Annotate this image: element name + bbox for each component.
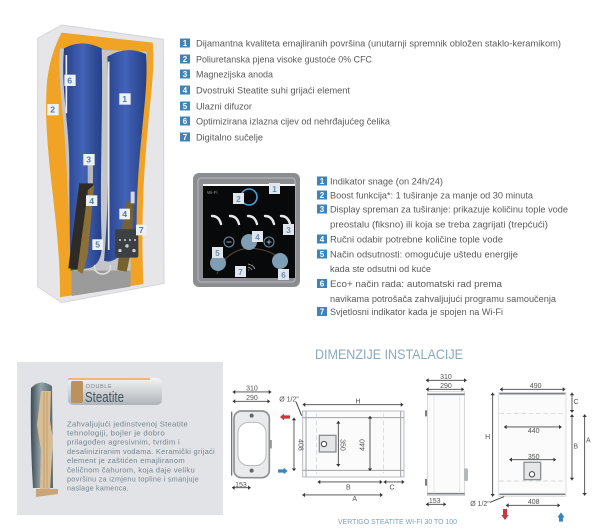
illustration: water heater cutaway (38, 25, 164, 303)
item 5: 5 (183, 102, 188, 111)
diagram: horizontal installation: Ø 1/2" (279, 397, 299, 404)
function 2: Boost funkcija*: 1 tuširanje za manje od 30 minuta (330, 190, 533, 200)
item 1: Dijamantna kvaliteta emajliranih površina (unutarnji spremnik obložen staklo-keramikom) (196, 38, 561, 48)
caption: model range: VERTIGO STEATITE WI-FI 30 TO 100 (338, 517, 457, 526)
function 6: Eco+ način rada: automatski rad prema (330, 279, 502, 289)
diagram: vertical installation: 350 (528, 454, 540, 461)
function 5: kada ste odsutni od kuće (330, 264, 431, 274)
steatite description (67, 420, 215, 492)
dimensions (303, 403, 403, 406)
diagram: vertical installation: C (573, 399, 579, 406)
function 1: Indikator snage (on 24h/24) (330, 176, 443, 186)
diagram: vertical installation: B (573, 443, 578, 450)
diagram: side view (426, 374, 468, 505)
heating element right (117, 202, 134, 272)
number labels (47, 75, 147, 250)
function 3: 3 (320, 205, 325, 214)
steatite description: površinu za izmjenu topline i smanjuje (67, 474, 199, 484)
polyurethane foam (46, 33, 153, 297)
function 5 (317, 250, 518, 274)
steatite description: čeličnom čahurom, koja daje veliku (67, 466, 195, 474)
panel number labels: 5 (215, 249, 220, 258)
bottom cavity (72, 271, 131, 296)
diagram: top view: 290 (246, 395, 258, 402)
control panel illustration: Wi-Fi (207, 190, 218, 195)
panel number labels: 7 (238, 268, 243, 277)
diagram: horizontal installation: 350 (339, 439, 346, 451)
right tank (104, 50, 147, 262)
steatite description: desaliniziranim vodama. Keramički grijaći (67, 447, 215, 456)
boost ring (241, 189, 257, 205)
function 6: 6 (320, 280, 325, 288)
function 5: Način odsutnosti: omogućuje uštedu energije (330, 250, 518, 260)
steatite description: Zahvaljujući jedinstvenoj Steatite (67, 420, 188, 428)
number labels: 1 (122, 94, 127, 104)
panel number labels: 3 (286, 226, 291, 235)
red outlet arrow (280, 414, 290, 420)
diagram: vertical installation: 440 (528, 428, 540, 435)
steatite badge: Steatite (85, 390, 124, 406)
dimensions (500, 388, 565, 391)
item 4: Dvostruki Steatite suhi grijaći element (196, 86, 350, 96)
steatite description: naslage kamenca. (67, 484, 129, 492)
display box (524, 462, 541, 480)
diagram: side view: 153 (429, 498, 441, 505)
diagram: top view: 310 (246, 386, 258, 393)
panel number labels: 2 (236, 195, 241, 204)
number labels: 3 (86, 155, 91, 165)
panel frame (193, 173, 300, 287)
number labels: 4 (122, 209, 127, 219)
heater casing (38, 25, 164, 303)
steatite badge (68, 378, 162, 406)
diagram: top view (232, 386, 271, 489)
function 7: Svjetlosni indikator kada je spojen na Wi-Fi (330, 307, 503, 317)
function 6: navikama potrošača zahvaljujući programu samoučenja (330, 294, 556, 304)
item 2: Poliuretanska pjena visoke gustoće 0% CFC (196, 54, 372, 64)
diagram: top view: 153 (235, 482, 247, 489)
outlet tubes (66, 55, 109, 250)
number labels: 2 (50, 105, 55, 115)
feature list: control panel functions (317, 176, 568, 317)
number labels: 7 (139, 225, 144, 235)
black screen (203, 184, 295, 278)
panel background (17, 362, 223, 515)
red outlet arrow (501, 509, 509, 520)
number labels: 4 (89, 196, 94, 206)
heading: installation dimensions: DIMENZIJE INSTALACIJE (315, 346, 463, 362)
item 3: 3 (183, 70, 188, 79)
function 1: 1 (320, 177, 325, 186)
blue inlet arrow (557, 512, 565, 522)
function 4: 4 (320, 235, 325, 244)
mini display (115, 229, 138, 258)
steatite description: tehnologiji, bojler je dobro (67, 428, 165, 438)
diagram: vertical installation: H (485, 434, 490, 441)
function 2: 2 (320, 191, 325, 200)
diagram: side view: 310 (440, 374, 452, 381)
panel number labels: 4 (255, 233, 260, 242)
panel number labels (212, 183, 294, 280)
diagram: horizontal installation (278, 397, 404, 503)
diagram: vertical installation: A (586, 438, 591, 445)
blue inlet arrow (278, 468, 288, 474)
diagram: vertical installation: Ø 1/2" (470, 501, 490, 508)
function 5: 5 (320, 250, 325, 259)
panel: double steatite (17, 362, 223, 515)
arc (217, 248, 282, 274)
diagram: horizontal installation: H (355, 398, 361, 405)
item 7: Digitalno sučelje (196, 132, 263, 142)
steatite description: prilagođen agresivnim, tvrdim i (67, 438, 180, 446)
panel number labels: 6 (281, 271, 286, 280)
diagram: vertical installation: 490 (530, 383, 542, 390)
shower icons (212, 216, 290, 224)
diagram: horizontal installation: B (346, 484, 351, 491)
item 6: Optimizirana izlazna cijev od nehrđajućeg čelika (196, 116, 390, 126)
diagram: horizontal installation: A (352, 496, 357, 503)
function 7: 7 (320, 308, 325, 316)
function 3: preostalu (fiksno) ili koja se treba zagrijati (trepćući) (330, 220, 548, 230)
panel number labels: 1 (272, 185, 277, 194)
function 4: Ručni odabir potrebne količine tople vode (330, 234, 503, 244)
item 3: Magnezijska anoda (196, 70, 273, 80)
item 4: 4 (183, 86, 188, 95)
left tank (63, 43, 102, 271)
anode (88, 163, 93, 183)
diagram: horizontal installation: 440 (360, 439, 367, 451)
control buttons (210, 234, 288, 271)
diagram: horizontal installation: 408 (297, 439, 304, 451)
diffuser (94, 265, 110, 274)
item 5: Ulazni difuzor (196, 102, 252, 112)
steatite badge: DOUBLE (86, 384, 112, 390)
display box (319, 435, 336, 452)
control panel illustration (193, 173, 300, 287)
item 1: 1 (183, 39, 188, 48)
feature list: heater components (180, 38, 561, 142)
steatite description: element je zaštićen emajliranom (67, 456, 185, 465)
item 2: 2 (183, 55, 188, 64)
icon: steatite heating element (31, 382, 58, 497)
wifi symbol (248, 264, 255, 270)
number labels: 6 (67, 75, 72, 85)
item 6: 6 (183, 117, 188, 126)
item 7: 7 (183, 133, 188, 142)
diagram: vertical installation: 408 (528, 499, 540, 506)
function 3 (317, 204, 568, 230)
inner shell shadow (59, 48, 147, 271)
diagram: side view: 290 (440, 383, 452, 390)
diagram: vertical installation (470, 383, 591, 522)
function 3: Display spreman za tuširanje: prikazuje količinu tople vode (330, 204, 568, 214)
heating element left (68, 183, 93, 270)
function 6 (317, 279, 556, 304)
number labels: 5 (95, 240, 100, 250)
diagram: horizontal installation: C (389, 484, 395, 491)
